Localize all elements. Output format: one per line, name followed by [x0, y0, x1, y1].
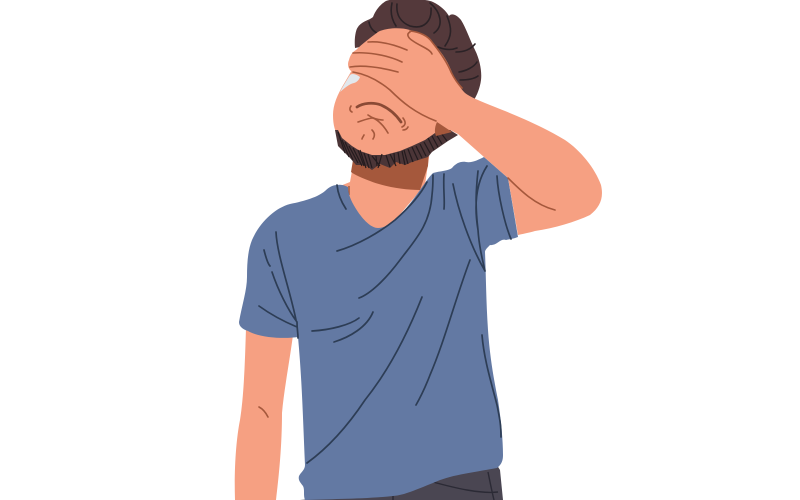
lower arm	[235, 328, 293, 500]
tear	[340, 74, 360, 92]
t-shirt	[239, 157, 518, 500]
neck	[335, 150, 430, 232]
eyebrow	[357, 103, 401, 122]
nose and cheek wrinkles	[350, 106, 408, 139]
jeans	[300, 462, 503, 500]
raised arm and hand	[348, 28, 602, 235]
elbow crease	[508, 178, 555, 210]
finger lines	[350, 42, 407, 72]
hair	[355, 0, 481, 100]
beard	[335, 122, 458, 170]
face	[333, 70, 452, 160]
